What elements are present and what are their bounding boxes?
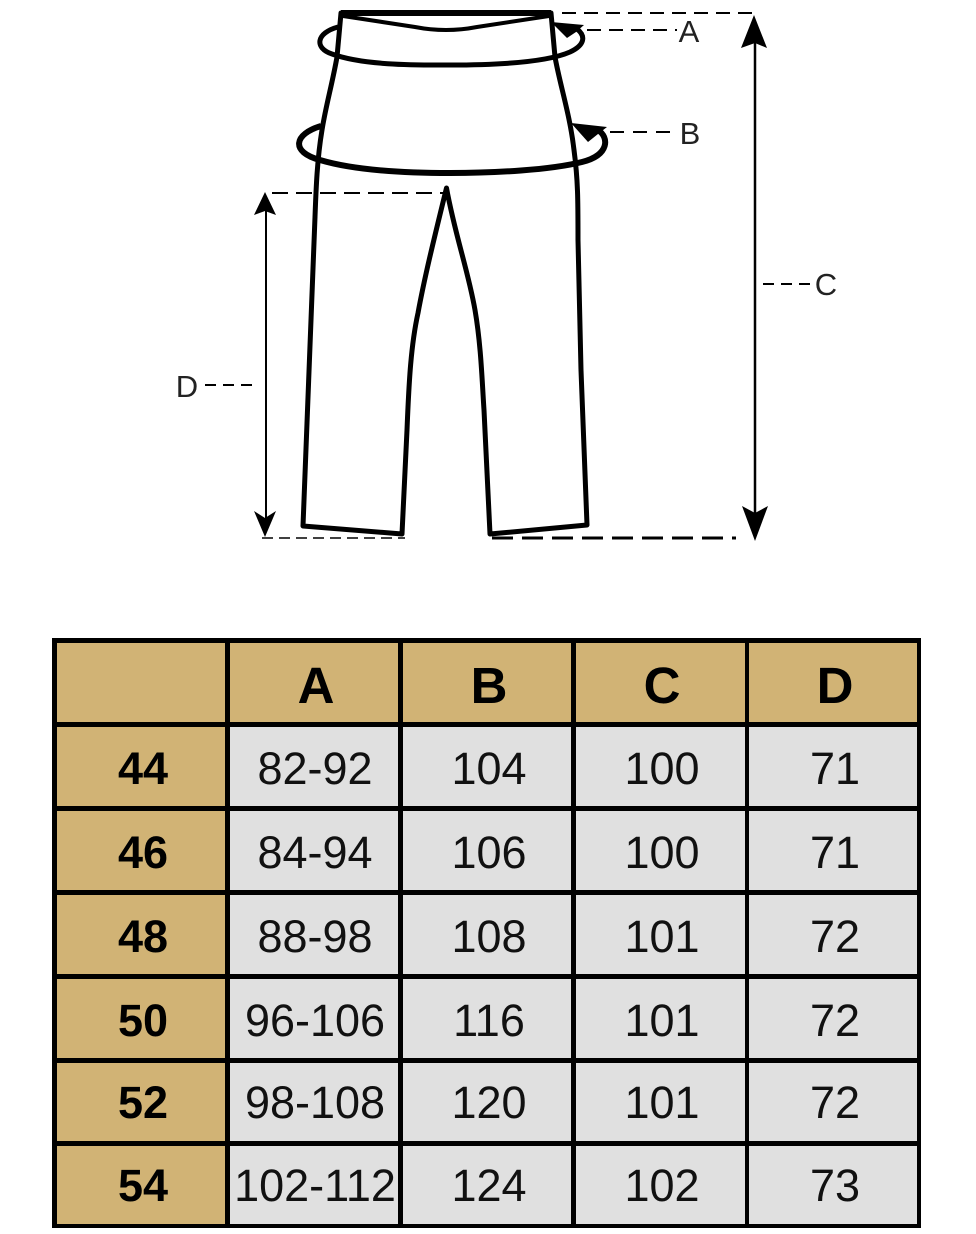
waist measuring loop A bbox=[320, 22, 584, 65]
hip measuring loop B bbox=[299, 123, 607, 173]
trousers outline bbox=[303, 13, 587, 534]
row 48 bbox=[118, 911, 860, 962]
row 54 bbox=[118, 1160, 860, 1211]
row 44: 100 bbox=[624, 743, 700, 794]
row 44: 44 bbox=[118, 743, 168, 794]
size table bbox=[52, 638, 921, 1228]
header row: D bbox=[817, 657, 853, 714]
row 54: 73 bbox=[810, 1160, 860, 1211]
row 52 bbox=[118, 1077, 860, 1128]
row 54: 124 bbox=[451, 1160, 527, 1211]
row 46: 71 bbox=[810, 827, 860, 878]
label D: D bbox=[176, 369, 198, 404]
row 48: 108 bbox=[451, 911, 527, 962]
row 48: 72 bbox=[810, 911, 860, 962]
row 44: 82-92 bbox=[257, 743, 373, 794]
table frame and cell backgrounds bbox=[52, 638, 921, 1228]
arrow: inseam D bbox=[254, 192, 276, 537]
header row: B bbox=[471, 657, 507, 714]
row 52: 120 bbox=[451, 1077, 527, 1128]
row 46: 106 bbox=[451, 827, 527, 878]
row 52: 98-108 bbox=[245, 1077, 385, 1128]
row 46: 84-94 bbox=[257, 827, 373, 878]
row 54: 102-112 bbox=[234, 1160, 396, 1211]
row 54: 102 bbox=[624, 1160, 700, 1211]
label C: C bbox=[815, 267, 837, 302]
row 48: 101 bbox=[624, 911, 700, 962]
row 52: 52 bbox=[118, 1077, 168, 1128]
row 44: 104 bbox=[451, 743, 527, 794]
row 50: 116 bbox=[453, 995, 525, 1046]
row 48: 88-98 bbox=[257, 911, 373, 962]
row 54: 54 bbox=[118, 1160, 168, 1211]
header row bbox=[298, 657, 853, 714]
row 48: 48 bbox=[118, 911, 168, 962]
row 52: 72 bbox=[810, 1077, 860, 1128]
dashed guide lines bbox=[205, 13, 811, 538]
row 46: 100 bbox=[624, 827, 700, 878]
arrow: full length C bbox=[741, 15, 768, 541]
label B: B bbox=[680, 116, 700, 151]
row 52: 101 bbox=[624, 1077, 700, 1128]
row 50 bbox=[118, 995, 860, 1046]
row 44 bbox=[118, 743, 860, 794]
row 50: 72 bbox=[810, 995, 860, 1046]
header row: C bbox=[644, 657, 680, 714]
row 50: 101 bbox=[624, 995, 700, 1046]
row 44: 71 bbox=[810, 743, 860, 794]
row 50: 96-106 bbox=[245, 995, 385, 1046]
row 46: 46 bbox=[118, 827, 168, 878]
diagram: trousers measurement bbox=[205, 13, 811, 541]
row 46 bbox=[118, 827, 860, 878]
row 50: 50 bbox=[118, 995, 168, 1046]
header row: A bbox=[298, 657, 334, 714]
label A: A bbox=[679, 14, 700, 49]
